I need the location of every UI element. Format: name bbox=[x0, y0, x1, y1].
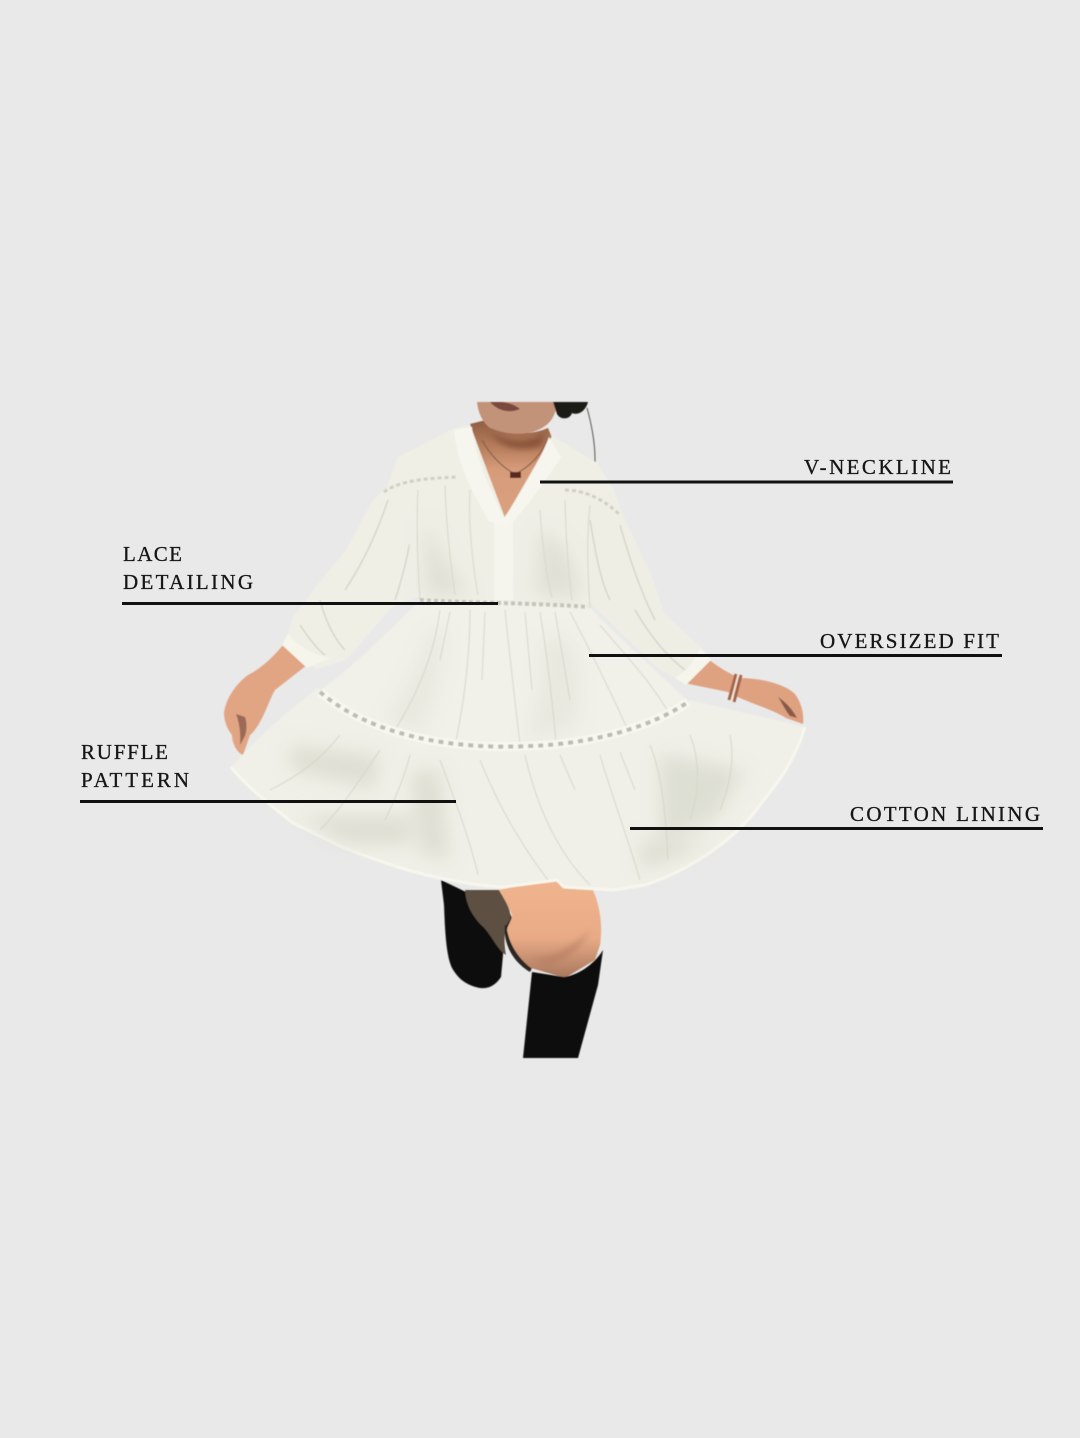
pendant bbox=[510, 472, 521, 478]
label text: COTTON LINING bbox=[850, 802, 1040, 826]
boot inner lining bbox=[465, 890, 510, 955]
leader line bbox=[80, 800, 456, 803]
skirt tier one bbox=[318, 600, 690, 751]
dress photo: model in white tiered dress bbox=[224, 402, 805, 1058]
lace shoulder left bbox=[384, 477, 458, 492]
neck and chest bbox=[470, 420, 552, 519]
label text: V-NECKLINE bbox=[804, 455, 951, 479]
label: ruffle pattern bbox=[80, 740, 456, 803]
collar band bbox=[454, 427, 561, 530]
leader line bbox=[122, 602, 498, 605]
lips bbox=[490, 402, 520, 411]
bodice bbox=[385, 425, 614, 610]
bodice shadows bbox=[425, 520, 580, 598]
left sleeve folds bbox=[300, 500, 415, 655]
bodice seams bbox=[417, 485, 590, 610]
skirt folds bbox=[270, 610, 732, 885]
left hand shadow bbox=[236, 714, 246, 745]
label: lace detailing bbox=[122, 542, 498, 605]
face and chin bbox=[477, 402, 557, 434]
knee crease bbox=[527, 930, 590, 966]
left sleeve bbox=[285, 457, 425, 669]
right sleeve folds bbox=[590, 520, 685, 670]
skirt tier two bbox=[231, 688, 805, 890]
necklace bbox=[482, 438, 548, 474]
label text: LACE bbox=[123, 542, 182, 566]
left arm and hand bbox=[224, 645, 307, 755]
left cuff bbox=[282, 634, 330, 668]
label text line two: PATTERN bbox=[81, 768, 189, 792]
boot strap shadow bbox=[505, 925, 533, 972]
skirt hem bbox=[231, 727, 805, 890]
label: cotton lining bbox=[630, 802, 1043, 830]
skirt tier one shading bbox=[385, 630, 580, 740]
bracelet bbox=[729, 674, 741, 702]
knee bbox=[499, 878, 601, 978]
lace skirt pattern bbox=[320, 692, 688, 747]
lace skirt band bbox=[320, 692, 688, 747]
raised leg boot bbox=[441, 880, 512, 988]
neck shadow bbox=[490, 432, 545, 449]
standing boot bbox=[523, 950, 603, 1058]
bracelet highlight bbox=[732, 674, 738, 701]
leader line bbox=[630, 827, 1043, 830]
label: oversized fit bbox=[589, 629, 1002, 657]
right arm and hand bbox=[684, 659, 803, 724]
right sleeve bbox=[580, 463, 710, 683]
lace waist band bbox=[420, 600, 588, 607]
label text: RUFFLE bbox=[81, 740, 168, 764]
hair bbox=[553, 402, 588, 418]
button placket bbox=[494, 522, 513, 600]
leader line bbox=[589, 654, 1002, 657]
hair strand bbox=[567, 408, 595, 504]
lace shoulder right bbox=[565, 490, 620, 515]
label text: OVERSIZED FIT bbox=[820, 629, 999, 653]
right cuff bbox=[675, 648, 711, 685]
label: v-neckline bbox=[540, 455, 953, 484]
skirt tier two shading bbox=[290, 745, 745, 870]
label text line two: DETAILING bbox=[123, 570, 253, 594]
leader line bbox=[540, 480, 953, 484]
right hand shadow bbox=[778, 697, 797, 718]
